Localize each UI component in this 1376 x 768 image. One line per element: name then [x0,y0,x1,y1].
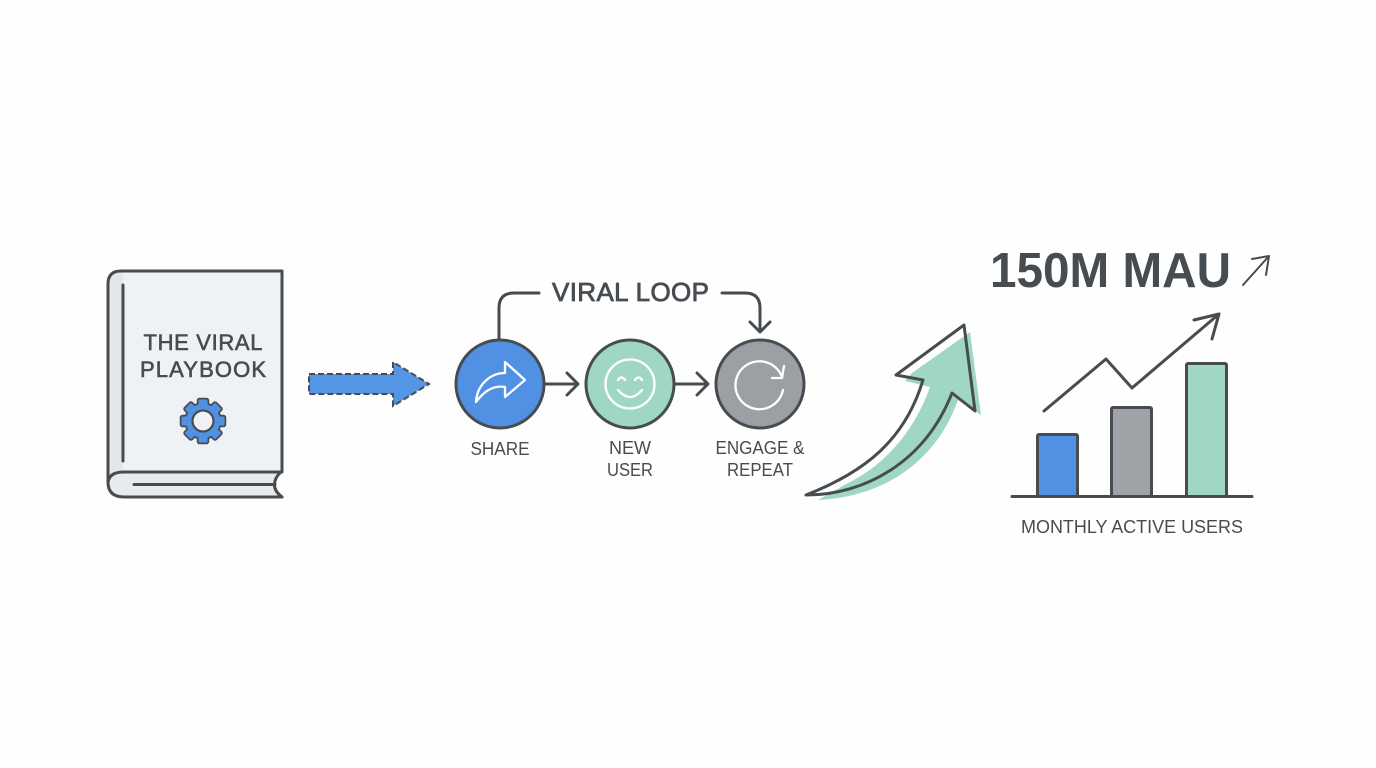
book title: PLAYBOOK [140,357,266,382]
label: new user [607,438,653,480]
label: engage and repeat: ENGAGE & [716,438,804,458]
book outline [108,271,282,497]
label: engage and repeat [716,438,804,480]
icon: small up arrow [1243,256,1269,285]
bar: teal [1186,364,1226,496]
label: share: SHARE [470,439,530,459]
panel: viral playbook book [108,271,282,497]
panel: viral loop [456,277,804,480]
step: engage and repeat [716,340,804,480]
chart baseline [1012,495,1252,498]
label: new user: USER [607,460,653,480]
icon: gear [182,400,224,442]
panel: monthly active users chart [990,244,1269,537]
arrow: share to new user [545,373,578,395]
book title: THE VIRAL [144,330,262,355]
bar: gray [1112,408,1152,496]
book spine shade [108,271,123,482]
growth arrow outline [806,325,975,495]
arrow: dashed blue arrow [309,362,429,406]
stat: 150M MAU: 150M MAU [990,244,1231,298]
book bottom pages [108,472,282,497]
book title [140,330,266,382]
icon: repeat [735,361,784,409]
trend line [1044,314,1219,411]
arrow: new user to engage [675,373,708,395]
bar: blue [1038,434,1078,496]
growth arrow teal shadow [818,332,981,500]
icon: smiley [606,360,654,408]
step: new user [586,340,674,480]
arrow: loop connector right [722,293,770,332]
label: new user: NEW [609,438,651,458]
icon: share arrow [476,362,525,402]
step: share [456,340,544,459]
book spine line [122,285,124,461]
arrow: loop connector left [499,293,539,340]
label: monthly active users: MONTHLY ACTIVE USERS [1021,517,1243,537]
arrow: large growth arrow [806,325,981,500]
book cover [108,271,282,497]
label: engage and repeat: REPEAT [727,460,793,480]
book bottom line [134,483,275,486]
heading: viral loop: VIRAL LOOP [552,277,709,307]
